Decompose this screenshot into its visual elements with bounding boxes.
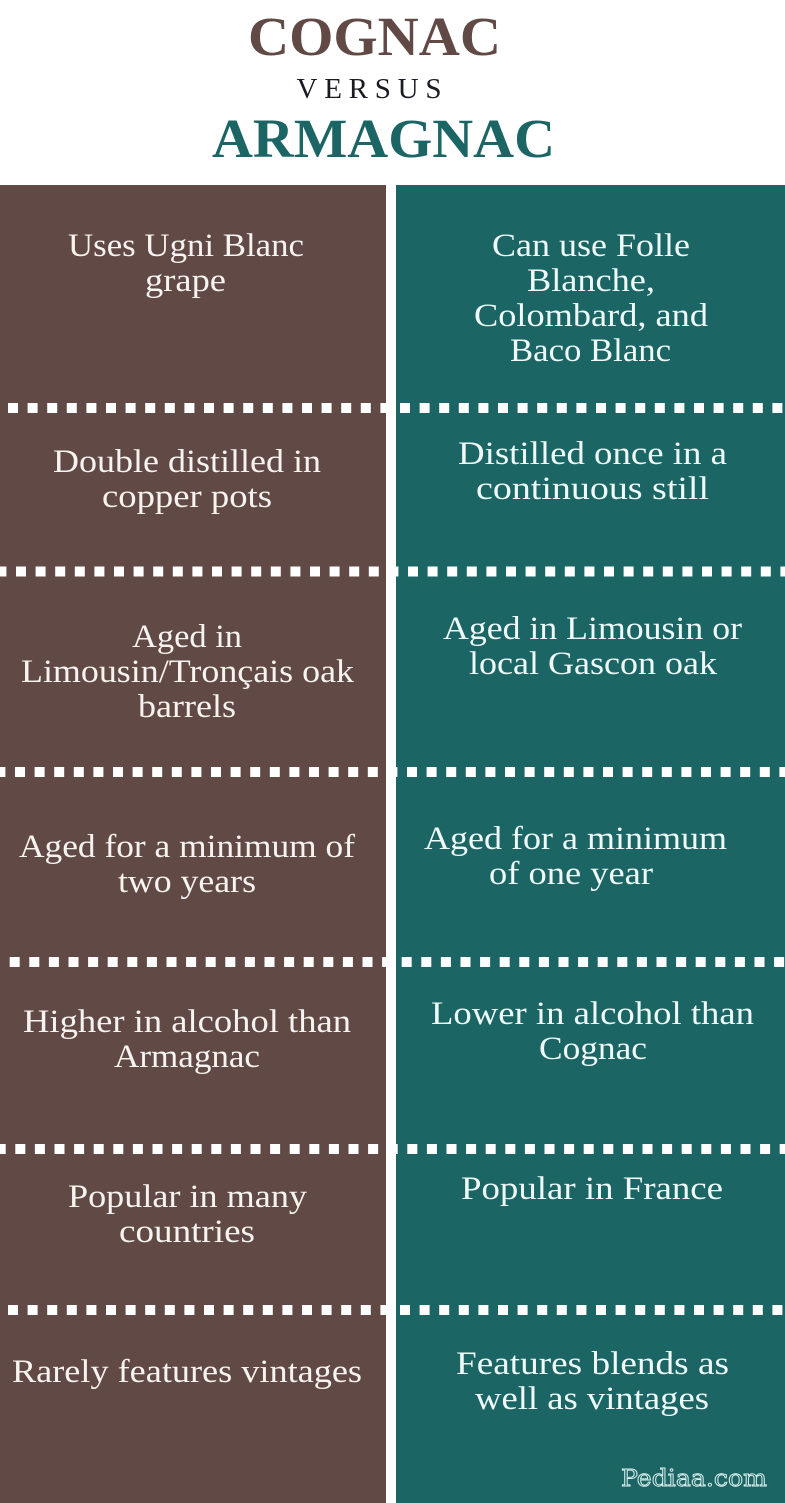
text: grapes: Colombard, and	[474, 298, 709, 334]
text: distillation: copper pots	[102, 479, 272, 515]
text: grapes	[474, 228, 709, 369]
text: aging time: of one year	[489, 856, 653, 892]
text: aging time: Aged for a minimum	[424, 821, 727, 857]
text: distillation: Distilled once in a	[458, 436, 727, 472]
text: oak	[21, 619, 355, 725]
text: grape	[68, 228, 304, 299]
text: oak: Aged in	[132, 619, 242, 655]
text: popularity	[68, 1179, 308, 1250]
title: Cognac: COGNAC	[248, 6, 501, 67]
title: Armagnac: ARMAGNAC	[212, 108, 555, 169]
panel background: Armagnac	[396, 185, 785, 1503]
text: grapes: Blanche,	[527, 263, 655, 299]
text: alcohol: Armagnac	[114, 1039, 260, 1075]
text: distillation	[458, 436, 727, 507]
text: vintages: Features blends as	[456, 1346, 729, 1382]
text: grape: Uses Ugni Blanc	[68, 228, 304, 264]
title block	[212, 6, 555, 169]
text: popularity: Popular in many	[68, 1179, 308, 1215]
text: distillation	[53, 444, 321, 515]
text: oak: Limousin/Tronçais oak	[21, 654, 355, 690]
text: oak: Aged in Limousin or	[443, 611, 742, 647]
text: alcohol: Lower in alcohol than	[431, 996, 754, 1032]
text: vintages: Rarely features vintages	[12, 1354, 362, 1390]
text: alcohol	[23, 1004, 351, 1075]
text: vintages	[456, 1346, 729, 1417]
text: oak: barrels	[138, 689, 236, 725]
logo: Pediaa.com: Pediaa.com	[621, 1466, 767, 1492]
text: aging time	[19, 829, 355, 900]
text: alcohol: Cognac	[539, 1031, 647, 1067]
text: popularity: Popular in France	[461, 1171, 723, 1207]
text: popularity: countries	[119, 1214, 255, 1250]
text: grape: grape	[145, 263, 226, 299]
panel: Armagnac column	[396, 185, 785, 1503]
versus label: VERSUS	[296, 73, 442, 105]
text: aging time: two years	[118, 864, 256, 900]
text: aging time: Aged for a minimum of	[19, 829, 355, 865]
text: distillation: Double distilled in	[53, 444, 321, 480]
text: oak	[443, 611, 742, 682]
text: oak: local Gascon oak	[469, 646, 718, 682]
text: alcohol	[431, 996, 754, 1067]
text: grapes: Can use Folle	[492, 228, 690, 264]
text: alcohol: Higher in alcohol than	[23, 1004, 351, 1040]
panel: Cognac column	[0, 185, 386, 1503]
text: distillation: continuous still	[476, 471, 709, 507]
text: vintages: well as vintages	[475, 1381, 709, 1417]
text: aging time	[424, 821, 727, 892]
panel background: Cognac	[0, 185, 386, 1503]
text: grapes: Baco Blanc	[510, 333, 671, 369]
